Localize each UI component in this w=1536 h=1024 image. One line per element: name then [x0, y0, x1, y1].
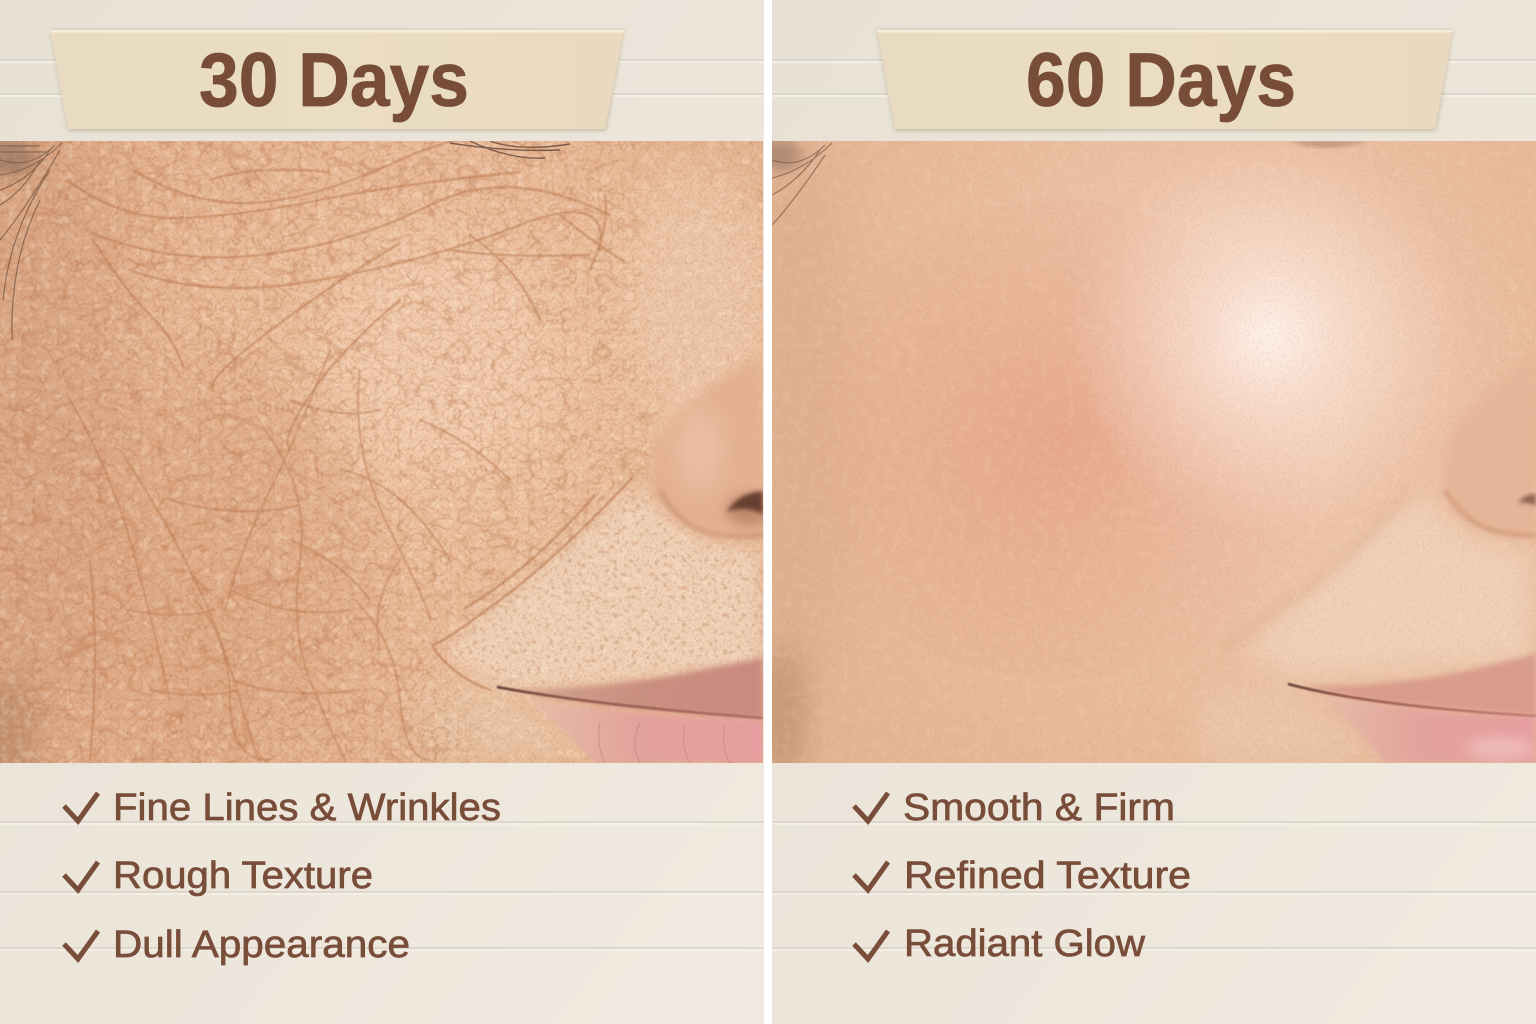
banner: 60 Days: [877, 30, 1453, 131]
item: Refined Texture: Refined Texture: [904, 855, 1191, 897]
icon: eyelashes hint: [450, 141, 570, 158]
patch: smooth area beside nose: [440, 485, 763, 690]
patch: smooth area beside nose: [1240, 490, 1536, 680]
mouth line: [497, 687, 763, 718]
nostril: [727, 491, 763, 514]
heading: 60 Days: 60 Days: [1026, 38, 1296, 123]
checklist: 30 days: [64, 787, 501, 966]
icon: hair strands: [772, 143, 832, 225]
item: Radiant Glow: Radiant Glow: [904, 923, 1146, 965]
heading: 30 Days: 30 Days: [199, 38, 469, 123]
icon: brow hint: [1290, 141, 1370, 148]
panel: 60 days: [730, 0, 1536, 1024]
item: Smooth & Firm: Smooth & Firm: [903, 787, 1175, 829]
smile line: [1236, 496, 1406, 640]
wrinkles: [67, 137, 632, 761]
checklist: 60 days: [854, 787, 1191, 965]
photo: smooth skin: [772, 141, 1536, 763]
icon: hair strands: [0, 143, 62, 340]
nostril: [1518, 494, 1536, 506]
lips: [1288, 652, 1536, 763]
nose: [652, 355, 774, 536]
banner: 30 Days: [50, 30, 624, 131]
item: Rough Texture: Rough Texture: [113, 855, 373, 897]
item: Dull Appearance: Dull Appearance: [113, 924, 410, 966]
nose: [1444, 355, 1536, 536]
panel background paper: [772, 0, 1536, 1024]
mouth line: [1288, 684, 1536, 716]
item: Fine Lines & Wrinkles: Fine Lines & Wrinkles: [113, 787, 501, 829]
lips: [497, 658, 766, 763]
photo: aged skin: [0, 141, 763, 763]
panel background paper: [0, 0, 764, 1024]
panel: 30 days: [0, 0, 780, 1024]
